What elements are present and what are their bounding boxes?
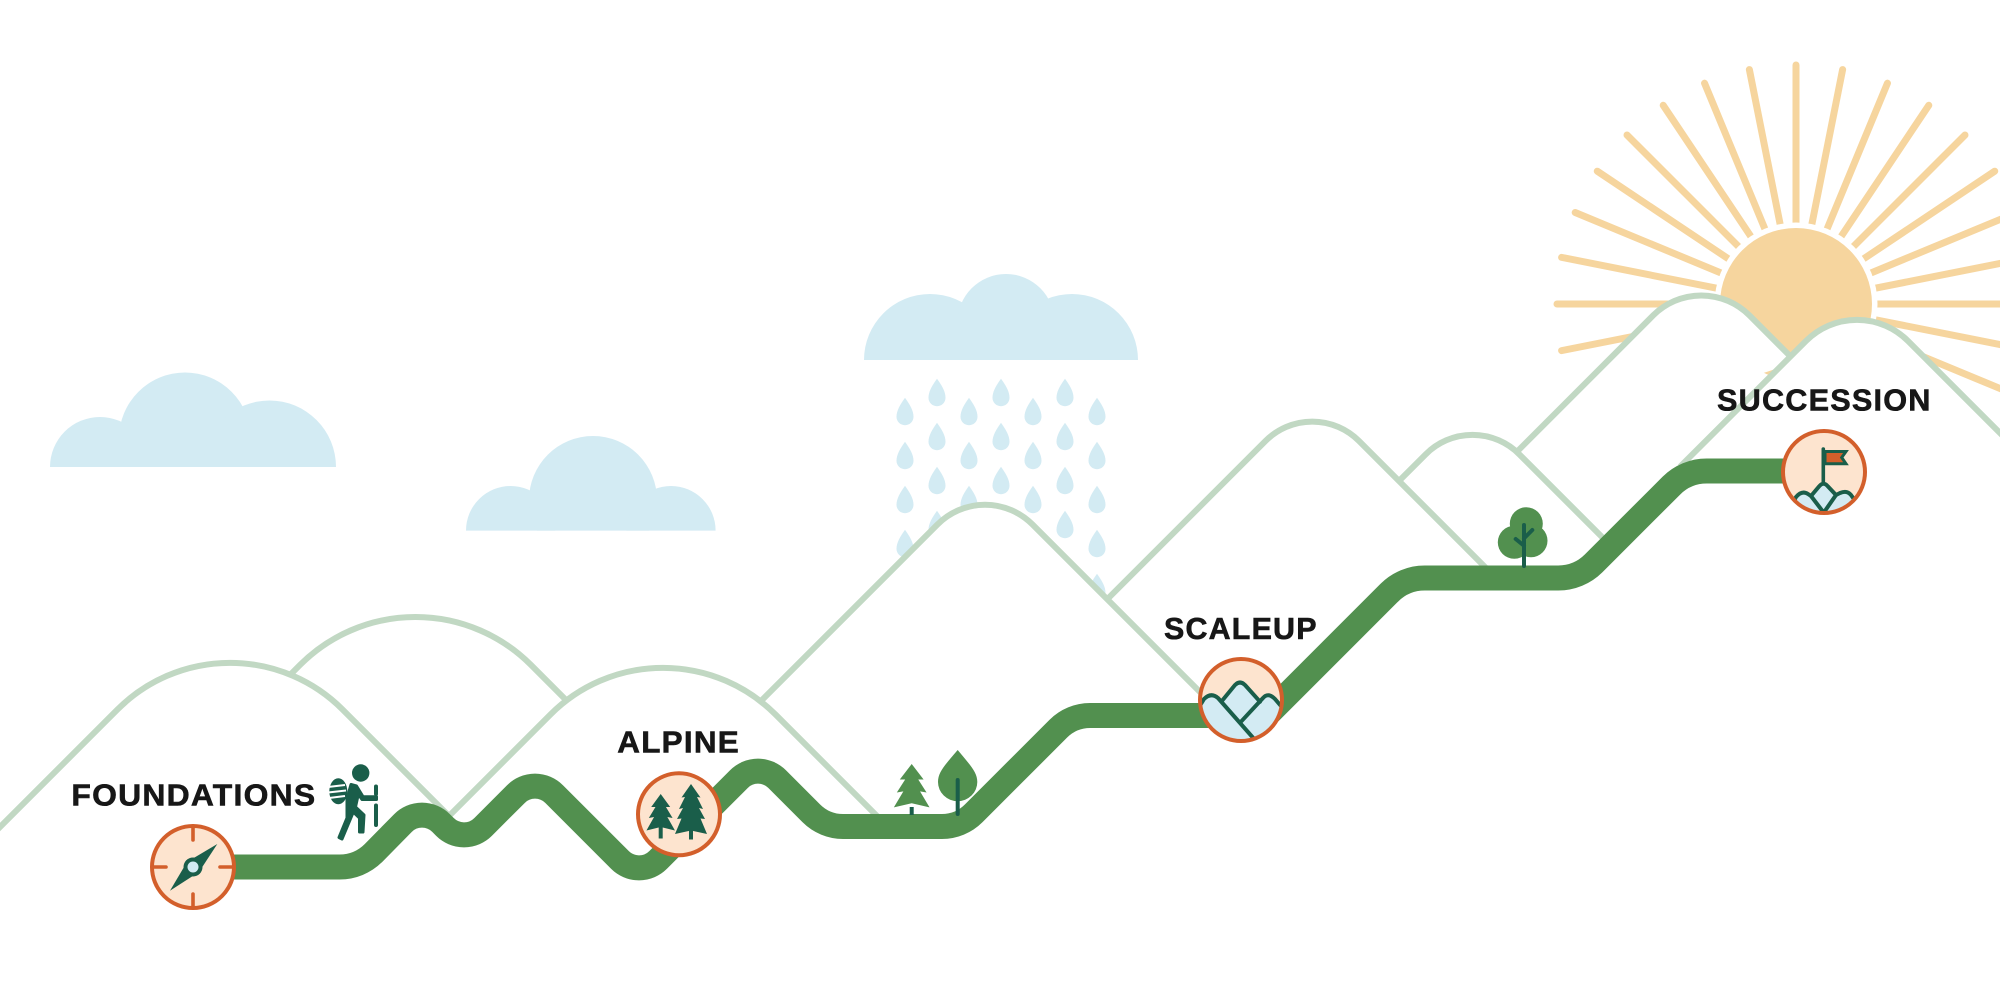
rain drops: [896, 379, 1106, 601]
icon: evergreen tree: [894, 764, 930, 815]
label: SCALEUP: SCALEUP: [1164, 611, 1318, 646]
cloud: rain cloud: [864, 274, 1138, 360]
label: ALPINE: ALPINE: [617, 725, 740, 760]
icon: round tree: [1498, 507, 1548, 566]
trail: [193, 471, 1824, 868]
badge: compass: [152, 826, 234, 908]
badge: scaleup mountains: [1195, 659, 1290, 745]
badge: succession flag: [1783, 431, 1865, 520]
hiker icon: [328, 764, 376, 839]
icon: leaf tree: [938, 750, 977, 814]
label: FOUNDATIONS: FOUNDATIONS: [71, 778, 316, 813]
sun: [1714, 222, 1878, 386]
sun rays: [1557, 65, 2000, 395]
cloud: left: [50, 372, 336, 467]
cloud: middle: [466, 436, 716, 531]
badge: alpine trees: [638, 773, 720, 855]
label: SUCCESSION: SUCCESSION: [1717, 383, 1932, 418]
mountains: background range: [0, 295, 2000, 832]
